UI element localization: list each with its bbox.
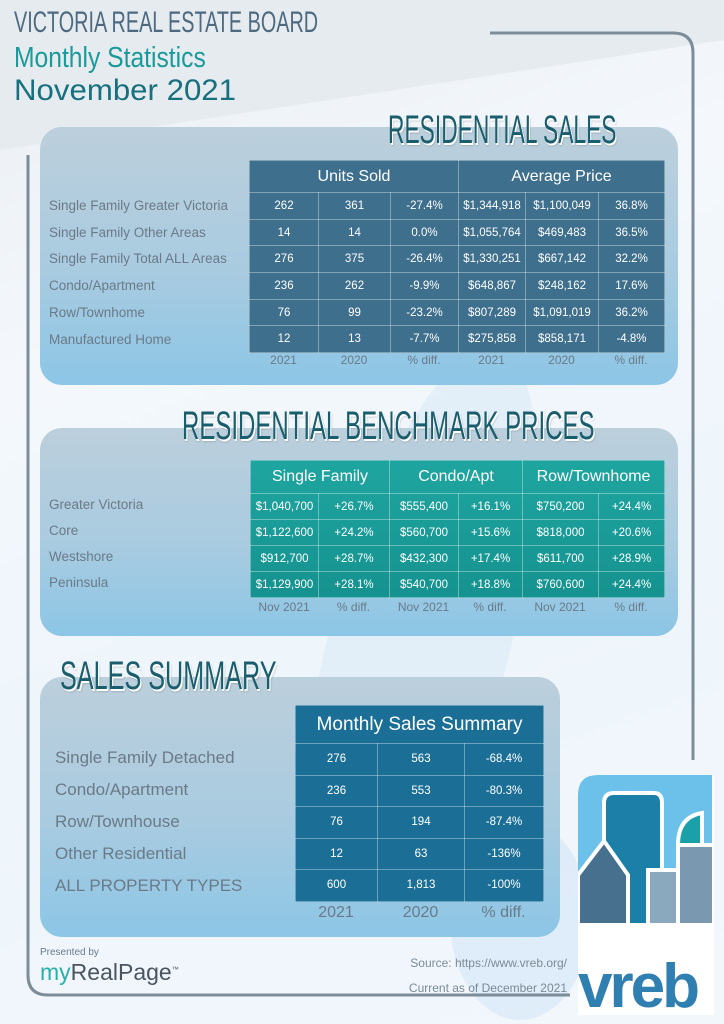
table: residential sales: 14 bbox=[348, 227, 361, 239]
header title: November 2021 bbox=[14, 74, 236, 107]
column footers: residential sales: 2020 bbox=[341, 353, 367, 367]
table: residential sales: -23.2% bbox=[406, 307, 443, 319]
source text: Current as of December 2021 bbox=[409, 981, 567, 995]
header title: VICTORIA REAL ESTATE BOARD bbox=[14, 6, 318, 39]
column footers: benchmark: Nov 2021 bbox=[534, 600, 586, 614]
row labels: residential sales: Single Family Other Areas bbox=[49, 225, 206, 240]
table: sales summary: 194 bbox=[411, 816, 431, 828]
column footers: residential sales: 2020 bbox=[548, 353, 575, 367]
row labels: benchmark: Greater Victoria bbox=[49, 497, 143, 512]
table: benchmark prices: $540,700 bbox=[400, 578, 448, 590]
table: residential sales: -26.4% bbox=[406, 253, 443, 265]
table: benchmark prices: Condo/Apt bbox=[418, 468, 494, 485]
row labels: residential sales: Single Family Total ALL Areas bbox=[49, 251, 227, 266]
table: residential sales: $648,867 bbox=[468, 280, 516, 292]
table: residential sales: 99 bbox=[348, 307, 361, 319]
table: sales summary: 12 bbox=[330, 848, 343, 860]
row labels: residential sales: Manufactured Home bbox=[49, 332, 171, 347]
column footers: benchmark: % diff. bbox=[614, 600, 648, 614]
column footers: sales summary: % diff. bbox=[481, 904, 526, 921]
table: residential sales: $1,055,764 bbox=[463, 227, 521, 239]
table: benchmark prices: $432,300 bbox=[400, 552, 448, 564]
table: benchmark prices: Single Family bbox=[272, 468, 368, 485]
table: benchmark prices: $912,700 bbox=[261, 552, 308, 564]
table: sales summary: -136% bbox=[487, 848, 521, 860]
table: residential sales: 76 bbox=[278, 307, 290, 319]
table: sales summary: 76 bbox=[330, 816, 343, 828]
source text: Source: https://www.vreb.org/ bbox=[410, 956, 567, 970]
column footers: benchmark: % diff. bbox=[337, 600, 370, 614]
table: residential sales: $275,858 bbox=[468, 333, 516, 345]
column footers: benchmark: % diff. bbox=[473, 600, 507, 614]
table: sales summary: 63 bbox=[415, 848, 427, 860]
table: benchmark prices: +28.1% bbox=[334, 578, 374, 590]
table: residential sales: $1,091,019 bbox=[533, 307, 591, 319]
row labels: sales summary bbox=[55, 748, 242, 895]
row labels: residential sales: Condo/Apartment bbox=[49, 278, 155, 293]
row labels: residential sales: Single Family Greater Victoria bbox=[49, 198, 228, 213]
table: residential sales: $1,330,251 bbox=[463, 253, 521, 265]
table: residential sales: 13 bbox=[348, 333, 361, 345]
table: residential sales: 262 bbox=[274, 200, 294, 212]
table: benchmark prices: Row/Townhome bbox=[537, 468, 650, 485]
table: residential sales: $1,344,918 bbox=[463, 200, 521, 212]
row labels: benchmark: Westshore bbox=[49, 549, 113, 564]
row labels: benchmark: Peninsula bbox=[49, 575, 108, 590]
table: residential sales: $858,171 bbox=[538, 333, 586, 345]
table: residential sales: 276 bbox=[274, 253, 294, 265]
table: sales summary: -80.3% bbox=[486, 785, 522, 797]
column footers: sales summary bbox=[318, 904, 526, 921]
table: residential sales: -4.8% bbox=[616, 333, 647, 345]
table: residential sales: -9.9% bbox=[409, 280, 440, 292]
row labels: sales summary: Single Family Detached bbox=[55, 748, 235, 767]
column footers: residential sales: % diff. bbox=[407, 353, 441, 367]
heading: benchmark prices: RESIDENTIAL BENCHMARK PRICES bbox=[182, 404, 595, 448]
panel: residential sales bbox=[40, 127, 678, 385]
heading: sales summary: SALES SUMMARY bbox=[60, 654, 277, 698]
row labels: benchmark bbox=[49, 497, 144, 590]
table: sales summary: -87.4% bbox=[486, 816, 522, 828]
table: sales summary: 1,813 bbox=[407, 879, 435, 891]
table: benchmark prices: $560,700 bbox=[400, 526, 448, 538]
table: benchmark prices: $1,040,700 bbox=[256, 500, 313, 512]
table: sales summary bbox=[295, 705, 544, 902]
panel: sales summary bbox=[40, 677, 560, 937]
table: residential sales: 36.2% bbox=[615, 307, 648, 319]
column footers: benchmark bbox=[258, 600, 648, 614]
table: sales summary: 563 bbox=[411, 753, 431, 765]
table: benchmark prices: +15.6% bbox=[471, 526, 510, 538]
table: residential sales: 0.0% bbox=[411, 227, 438, 239]
table: residential sales: Average Price bbox=[511, 168, 612, 184]
table: sales summary: 276 bbox=[327, 753, 346, 765]
column footers: benchmark: Nov 2021 bbox=[258, 600, 310, 614]
table: benchmark prices: +20.6% bbox=[612, 526, 651, 538]
table: benchmark prices bbox=[250, 460, 665, 598]
row labels: sales summary: Row/Townhouse bbox=[55, 812, 180, 831]
row labels: sales summary: ALL PROPERTY TYPES bbox=[55, 876, 242, 895]
table: sales summary: -68.4% bbox=[486, 753, 522, 765]
table: sales summary: 236 bbox=[327, 785, 346, 797]
table: residential sales: $667,142 bbox=[538, 253, 586, 265]
table: sales summary: 600 bbox=[327, 879, 346, 891]
column footers: residential sales bbox=[270, 353, 648, 367]
table: residential sales: 17.6% bbox=[615, 280, 648, 292]
table: residential sales: 14 bbox=[278, 227, 290, 239]
presented by myRealPage: Presented by bbox=[40, 947, 99, 958]
table: benchmark prices: $611,700 bbox=[537, 552, 584, 564]
table: benchmark prices: +26.7% bbox=[334, 500, 374, 512]
row labels: sales summary: Condo/Apartment bbox=[55, 780, 188, 799]
table: sales summary: Monthly Sales Summary bbox=[317, 714, 522, 734]
table: benchmark prices: +16.1% bbox=[471, 500, 510, 512]
table: residential sales: 262 bbox=[345, 280, 364, 292]
table: residential sales: 361 bbox=[345, 200, 364, 212]
row labels: sales summary: Other Residential bbox=[55, 844, 186, 863]
table: residential sales: -27.4% bbox=[406, 200, 443, 212]
table: residential sales: 236 bbox=[274, 280, 294, 292]
table: benchmark prices: +24.4% bbox=[612, 578, 651, 590]
table: benchmark prices: $555,400 bbox=[400, 500, 448, 512]
row labels: residential sales bbox=[49, 198, 228, 347]
table: benchmark prices: +24.4% bbox=[612, 500, 651, 512]
column footers: residential sales: 2021 bbox=[478, 353, 505, 367]
presented by myRealPage bbox=[40, 947, 179, 985]
table: residential sales: $248,162 bbox=[538, 280, 586, 292]
table: benchmark prices: +18.8% bbox=[471, 578, 510, 590]
table: residential sales: 375 bbox=[345, 253, 364, 265]
table: residential sales: $807,289 bbox=[468, 307, 516, 319]
table: benchmark prices: +28.7% bbox=[334, 552, 374, 564]
table: residential sales: 36.5% bbox=[615, 227, 648, 239]
heading: residential sales: RESIDENTIAL SALES bbox=[388, 108, 617, 152]
icon: vreb logo bbox=[578, 775, 714, 1015]
column footers: residential sales: 2021 bbox=[270, 353, 297, 367]
table: residential sales bbox=[249, 160, 665, 353]
header title: Monthly Statistics bbox=[14, 42, 206, 74]
table: residential sales: -7.7% bbox=[409, 333, 440, 345]
column footers: sales summary: 2020 bbox=[403, 904, 438, 921]
table: sales summary: 553 bbox=[411, 785, 431, 797]
table: benchmark prices: $1,129,900 bbox=[256, 578, 313, 590]
column footers: benchmark: Nov 2021 bbox=[398, 600, 449, 614]
panel: benchmark prices bbox=[40, 428, 678, 636]
table: benchmark prices: $760,600 bbox=[537, 578, 584, 590]
table: benchmark prices: $818,000 bbox=[537, 526, 584, 538]
source text bbox=[409, 956, 567, 995]
table: benchmark prices: +17.4% bbox=[471, 552, 510, 564]
table: residential sales: 12 bbox=[278, 333, 290, 345]
table: residential sales: $1,100,049 bbox=[533, 200, 591, 212]
column footers: residential sales: % diff. bbox=[614, 353, 648, 367]
table: residential sales: 32.2% bbox=[615, 253, 648, 265]
table: benchmark prices: +24.2% bbox=[334, 526, 374, 538]
row labels: benchmark: Core bbox=[49, 523, 78, 538]
table: benchmark prices: $750,200 bbox=[537, 500, 584, 512]
column footers: sales summary: 2021 bbox=[318, 904, 354, 921]
table: sales summary: -100% bbox=[487, 879, 521, 891]
table: benchmark prices: $1,122,600 bbox=[256, 526, 313, 538]
table: residential sales: $469,483 bbox=[538, 227, 586, 239]
presented by myRealPage: myRealPage™ bbox=[40, 959, 179, 985]
table: benchmark prices: +28.9% bbox=[612, 552, 651, 564]
row labels: residential sales: Row/Townhome bbox=[49, 305, 145, 320]
table: residential sales: Units Sold bbox=[318, 168, 390, 184]
header title bbox=[14, 6, 318, 107]
table: residential sales: 36.8% bbox=[615, 200, 648, 212]
